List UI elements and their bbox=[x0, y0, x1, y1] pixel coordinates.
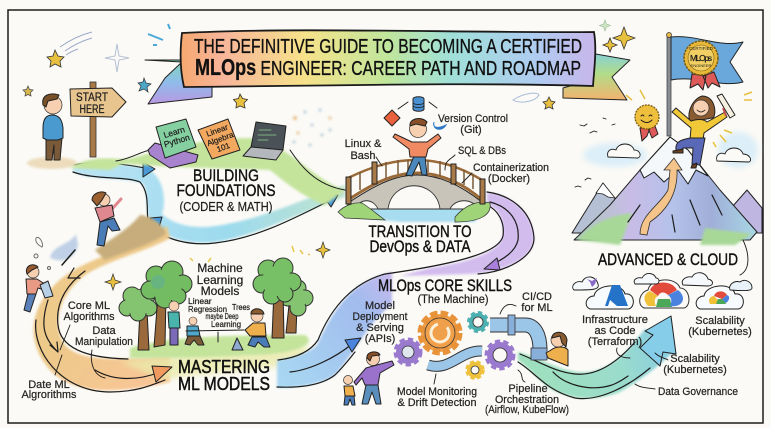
person kneeling bbox=[185, 317, 204, 345]
purple book bbox=[148, 143, 198, 168]
label: core ML algorithms: Core ML bbox=[68, 300, 110, 312]
heading: building foundations: (CODER & MATH) bbox=[180, 199, 272, 214]
books and laptop bbox=[148, 119, 286, 168]
diploma scroll bbox=[717, 94, 735, 118]
start here sign: HERE bbox=[80, 104, 105, 116]
start person bbox=[27, 94, 77, 169]
heading: building foundations bbox=[176, 167, 276, 214]
small decorative clouds bbox=[573, 273, 752, 291]
label: pipeline orchestration: Pipeline bbox=[508, 383, 548, 395]
grove labels bbox=[188, 261, 250, 329]
left labels: Algrorithms bbox=[22, 389, 77, 401]
smiley medal bbox=[635, 105, 659, 141]
title banner bbox=[145, 30, 630, 104]
heading: transition bbox=[368, 223, 472, 256]
laptop bbox=[243, 122, 286, 160]
person at pipe bbox=[546, 332, 568, 366]
birds bbox=[575, 118, 615, 187]
certified badge: CERTIFIED bbox=[689, 46, 714, 51]
cloud labels bbox=[582, 240, 752, 398]
heading: core skills: MLOps CORE SKILLS bbox=[378, 276, 512, 295]
banner title line two: MLOps ENGINEER: CAREER PATH AND ROADMAP bbox=[195, 54, 581, 80]
bridge water bbox=[355, 207, 480, 222]
banner left tail bbox=[145, 60, 212, 104]
core skill labels: Deployment bbox=[352, 311, 408, 323]
banner body bbox=[181, 30, 595, 87]
arrowhead: blue right bbox=[143, 162, 155, 177]
label: model deployment: Model bbox=[365, 300, 395, 312]
label: SQL and DBs: SQL & DBs bbox=[458, 145, 506, 157]
label: machine learning models: Machine bbox=[197, 261, 243, 275]
heading: building foundations: BUILDING bbox=[193, 167, 259, 185]
splash and machine bbox=[34, 234, 78, 270]
arrowhead: purple down-left bbox=[484, 258, 500, 270]
left labels: Algorithms bbox=[64, 311, 115, 323]
gear: large orange bbox=[421, 314, 459, 352]
label: model monitoring: Model Monitoring bbox=[397, 386, 477, 398]
bridge deck bbox=[348, 173, 483, 201]
bridge railing bbox=[348, 160, 482, 180]
star right of grove bbox=[316, 242, 330, 258]
label: version control: Version Control bbox=[438, 113, 508, 125]
heading: core skills: (The Machine) bbox=[418, 292, 488, 306]
heading: mastering ML models: ML MODELS bbox=[178, 374, 270, 394]
arrowhead: blue toward bridge bbox=[323, 195, 338, 207]
label: maybe deep learning: maybe Deep bbox=[206, 311, 239, 321]
start here sign bbox=[70, 82, 130, 170]
table and small figure bbox=[186, 330, 244, 342]
mountain snow bbox=[640, 137, 708, 184]
label: linear regression: Linear bbox=[188, 296, 212, 306]
bridge labels: (Git) bbox=[460, 124, 482, 136]
star near ML grove bbox=[105, 274, 121, 290]
bridge body bbox=[348, 175, 483, 209]
clouds behind the summit bbox=[583, 132, 758, 168]
book: Learn Python bbox=[156, 119, 196, 158]
tree right small bbox=[280, 280, 313, 333]
gear: purple left bbox=[396, 340, 420, 364]
person seated right bbox=[245, 309, 270, 347]
label: scalability lower: Scalability bbox=[670, 353, 720, 365]
cloud labels: (Terraform) bbox=[588, 336, 642, 348]
heading: mastering ML models: MASTERING bbox=[178, 357, 270, 377]
label: data manipulation: Data bbox=[92, 325, 116, 337]
mountain main body bbox=[574, 137, 757, 240]
tree left tall bbox=[141, 261, 192, 347]
confetti dots bbox=[292, 108, 332, 146]
banner right tail bbox=[563, 53, 630, 100]
book: Learn Python: Learn bbox=[162, 124, 186, 140]
core skill labels bbox=[352, 291, 569, 416]
person standing bbox=[168, 301, 180, 345]
woman on the left bbox=[24, 265, 53, 312]
river: orange ML path bbox=[34, 226, 310, 392]
cloud: google small bbox=[696, 286, 743, 309]
arrowhead: orange down bbox=[50, 268, 80, 352]
core skill labels: (Airflow, KubeFlow) bbox=[485, 404, 569, 416]
river: blue upper stream bbox=[73, 162, 345, 244]
book: Linear Algebra 101: Algebra bbox=[206, 130, 235, 148]
pipe middle bbox=[428, 351, 482, 366]
arrowhead: teal up-right bbox=[640, 316, 676, 366]
hiker bbox=[92, 192, 121, 246]
bridge labels: (Docker) bbox=[488, 173, 530, 185]
heading: advanced and cloud: ADVANCED & CLOUD bbox=[598, 251, 738, 269]
label: linux and bash: Linux & bbox=[345, 138, 382, 150]
gears and pipes bbox=[396, 313, 547, 378]
arrowhead: blue up-left bbox=[150, 217, 162, 231]
arrowhead: blue toward gears bbox=[345, 338, 361, 352]
icon: git diamond bbox=[384, 110, 400, 126]
core skill labels: & Drift Detection bbox=[398, 397, 476, 409]
grove labels: Models bbox=[201, 284, 239, 298]
mountain small peaks bbox=[572, 183, 640, 233]
core skill labels: for ML bbox=[521, 302, 553, 314]
label: scalability upper: Scalability bbox=[695, 315, 745, 327]
cloud labels: (Kubernetes) bbox=[688, 326, 752, 338]
heading: transition: TRANSITION TO bbox=[368, 223, 472, 241]
grove scene bbox=[119, 246, 313, 358]
book: Linear Algebra 101 bbox=[198, 119, 240, 159]
decorative stars: top right bbox=[513, 20, 635, 109]
label: date ML algrorithms: Date ML bbox=[28, 379, 70, 391]
heading: building foundations: FOUNDATIONS bbox=[176, 182, 276, 200]
label: data governance: Data Governance bbox=[658, 386, 738, 398]
grove labels: Learning bbox=[211, 319, 241, 329]
gear: teal bbox=[469, 313, 487, 331]
start here sign: START bbox=[76, 92, 108, 104]
climber at summit bbox=[626, 90, 752, 168]
bridge labels: Bash bbox=[350, 150, 376, 162]
heading: mastering ML models bbox=[178, 357, 270, 394]
bridge arches bbox=[355, 186, 478, 209]
gear: purple right bbox=[487, 342, 513, 368]
river: blue ML to core bbox=[277, 272, 392, 388]
core skill labels: (APIs) bbox=[365, 333, 395, 345]
bridge scene bbox=[338, 97, 490, 222]
heading: transition: DevOps & DATA bbox=[370, 238, 470, 256]
left labels bbox=[22, 300, 133, 401]
left labels: Manipulation bbox=[75, 336, 133, 348]
river: purple transition stream bbox=[385, 192, 534, 276]
heading: core skills bbox=[378, 276, 512, 306]
grove labels: Regression bbox=[188, 304, 227, 314]
label: CI/CD: CI/CD bbox=[522, 291, 552, 303]
pipe top bbox=[490, 325, 540, 350]
grass hill bbox=[130, 335, 309, 358]
arrowhead: orange right bbox=[152, 366, 172, 382]
river: green cloud path bbox=[518, 316, 676, 399]
hill: foundations green bbox=[118, 138, 345, 205]
label: trees: Trees bbox=[232, 302, 250, 312]
certified badge: ENGINEER bbox=[691, 63, 712, 68]
decorative stars: top left bbox=[23, 24, 248, 108]
certified badge bbox=[684, 41, 720, 90]
hill: hiker slope bbox=[95, 215, 166, 260]
tree right tall bbox=[253, 258, 301, 338]
adult and child bbox=[344, 352, 394, 405]
cloud: google large bbox=[640, 280, 689, 308]
mountain bbox=[572, 137, 762, 245]
core skill labels: & Serving bbox=[356, 322, 404, 334]
label: infrastructure as code: Infrastructure bbox=[582, 314, 648, 326]
icon: database bbox=[413, 97, 424, 111]
person juggling bbox=[393, 119, 441, 176]
grove labels: Learning bbox=[197, 273, 243, 287]
cloud: azure bbox=[586, 285, 633, 309]
cloud labels: (Kubernetes) bbox=[663, 364, 727, 376]
arrow up the mountain bbox=[640, 158, 682, 235]
cloud labels: as Code bbox=[595, 325, 635, 337]
book: Linear Algebra 101: Linear bbox=[205, 123, 229, 139]
book: Learn Python: Python bbox=[163, 132, 191, 149]
book: Linear Algebra 101: 101 bbox=[215, 141, 232, 154]
banner title line one: THE DEFINITIVE GUIDE TO BECOMING A CERTIFIED bbox=[194, 36, 582, 58]
bridge hills bbox=[338, 203, 385, 220]
core skill labels: Orchestration bbox=[495, 394, 559, 406]
icon: crescent bbox=[434, 122, 446, 129]
gear: yellow bbox=[467, 362, 483, 378]
flag and pole bbox=[666, 32, 743, 136]
bridge labels bbox=[345, 113, 549, 185]
certified badge: MLOps bbox=[690, 53, 712, 63]
tree left small bbox=[119, 287, 157, 350]
label: containerization: Containerization bbox=[473, 162, 549, 174]
sun rays bbox=[190, 246, 310, 262]
